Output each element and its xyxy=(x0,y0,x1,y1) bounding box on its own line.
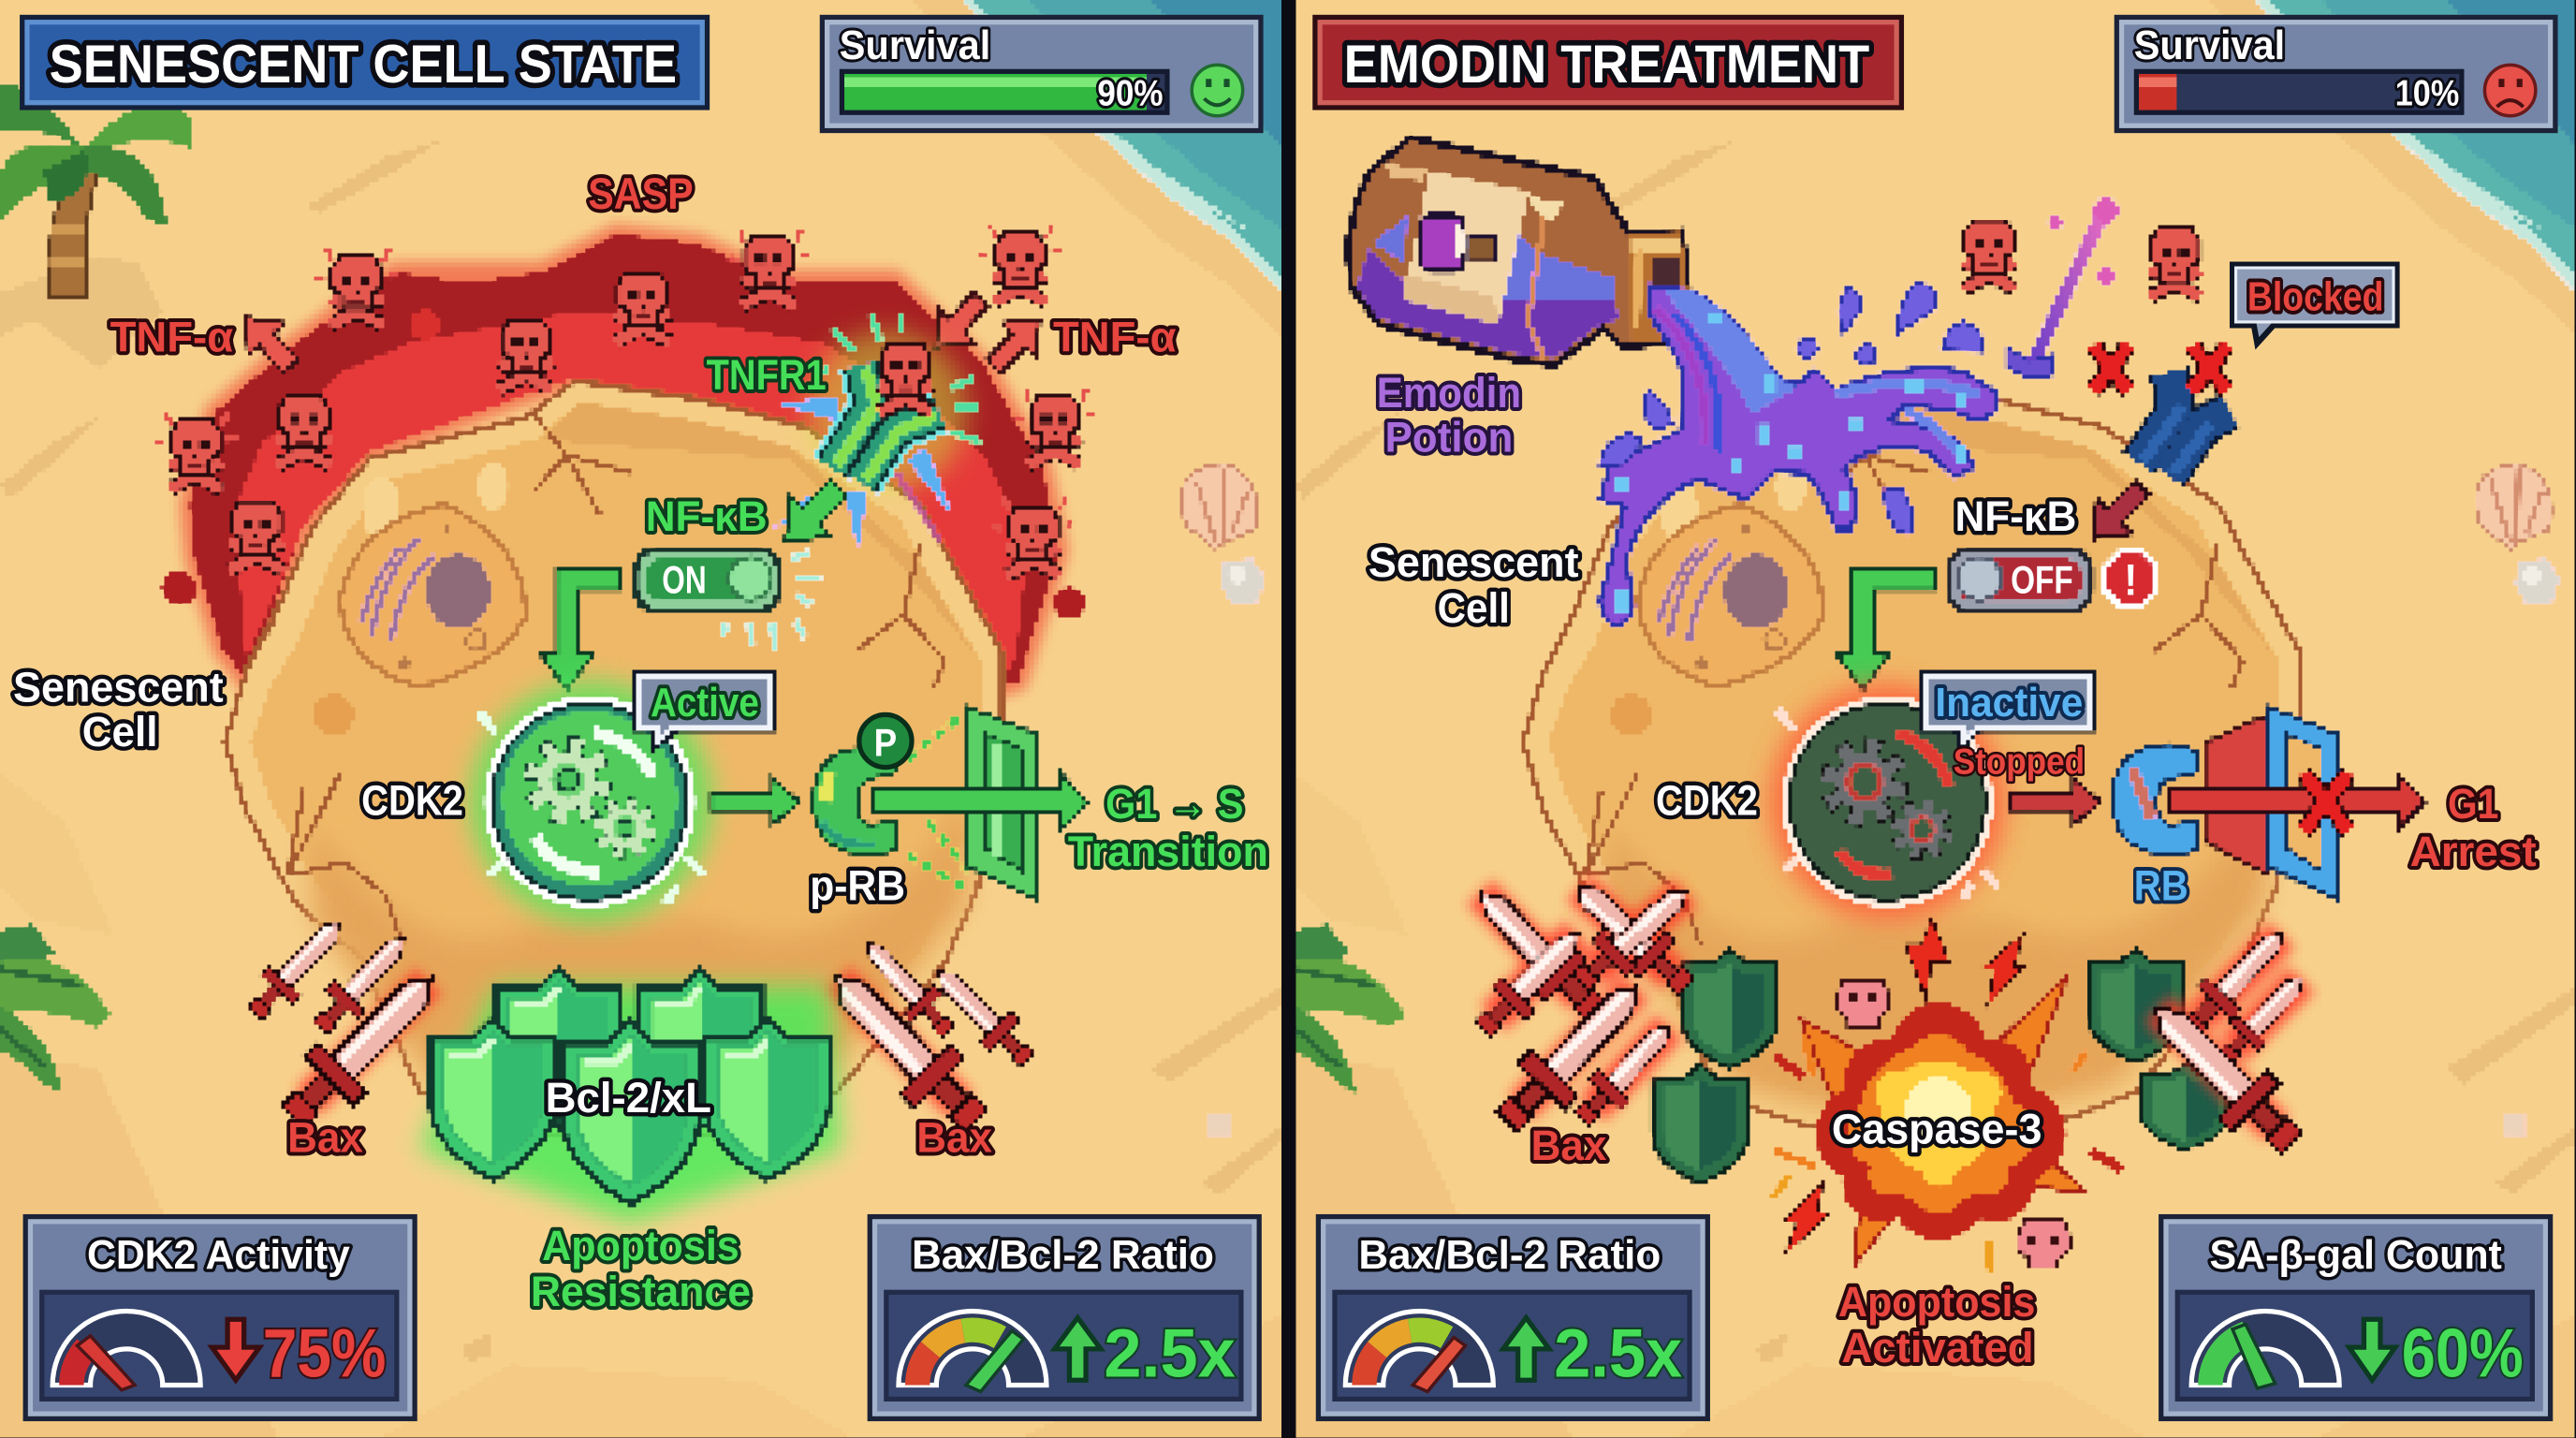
SASP skulls remaining xyxy=(1963,220,2202,298)
label: ON: ON xyxy=(662,558,707,602)
label: G1: G1 xyxy=(2448,780,2498,828)
label: activated: Activated xyxy=(1841,1324,2034,1372)
text labels: emodin panel xyxy=(1368,265,2537,1372)
label: apoptosis: Apoptosis xyxy=(542,1222,739,1269)
metric card: CDK2 activity: CDK2 Activity xyxy=(87,1232,350,1278)
label: NF-kB: NF-κB xyxy=(1954,492,2076,540)
arrow: TNFR1 to NF-kB xyxy=(766,469,858,562)
arrow: up xyxy=(1503,1318,1549,1380)
icon: Bax swords right xyxy=(812,929,1044,1145)
icon: caspase-3 explosion xyxy=(1771,917,2122,1273)
metric card: Bax/Bcl-2 ratio right xyxy=(1316,1214,1710,1421)
bubble: active xyxy=(636,672,774,749)
label: senescent cell: Senescent xyxy=(13,663,224,711)
arrow: G1 to S xyxy=(874,772,1088,831)
icon: Bax swords left xyxy=(1460,867,1703,1144)
icon: Bax swords left xyxy=(238,907,456,1141)
SASP droplets xyxy=(161,570,1086,620)
survival meter: 10 percent: 10% xyxy=(2395,73,2459,113)
survival meter: 90 percent: 90% xyxy=(1097,73,1164,113)
label: Bax: Bax xyxy=(1531,1122,1607,1169)
icon: open gate xyxy=(907,707,1038,901)
label: resistance: Resistance xyxy=(531,1268,751,1315)
title banner: senescent cell state xyxy=(20,15,710,110)
label: caspase-3: Caspase-3 xyxy=(1832,1105,2042,1152)
survival meter: 10 percent: Survival xyxy=(2134,22,2285,68)
arrow: down xyxy=(212,1319,259,1380)
label: inactive: Inactive xyxy=(1935,680,2083,726)
metric card: Bax/Bcl-2 ratio left xyxy=(868,1214,1262,1421)
icon: happy face xyxy=(1192,65,1243,116)
label: Bax right: Bax xyxy=(916,1113,993,1161)
icon: dark shields xyxy=(1653,949,2228,1183)
label: OFF: OFF xyxy=(2011,558,2073,602)
gauge: low activity xyxy=(52,1311,200,1390)
arrow: NF-kB to CDK2 xyxy=(1837,570,1937,690)
label: apoptosis: Apoptosis xyxy=(1838,1278,2035,1326)
metric card: SA-beta-gal count: 60% xyxy=(2402,1314,2524,1392)
title banner: emodin treatment: EMODIN TREATMENT xyxy=(1344,35,1869,95)
icon: sad face xyxy=(2484,65,2536,116)
icon: palm tree xyxy=(0,84,194,370)
label: G1 to S: G1 → S xyxy=(1105,780,1244,828)
metric card: SA-beta-gal count xyxy=(2159,1214,2553,1421)
SASP skulls xyxy=(154,225,1096,575)
beach background with ocean xyxy=(0,0,1281,1438)
arrow: TNF-alpha right xyxy=(976,302,1057,384)
beach background with ocean xyxy=(1295,0,2576,1438)
bubble: inactive xyxy=(1924,672,2095,749)
label: blocked bubble xyxy=(2232,265,2397,344)
icon: phosphorylated RB xyxy=(813,748,895,855)
metric card: Bax/Bcl-2 ratio left: Bax/Bcl-2 Ratio xyxy=(912,1232,1214,1278)
gauge: rising ratio xyxy=(899,1311,1046,1391)
senescent cell body with nucleus xyxy=(225,381,1003,1141)
title banner: senescent cell state: SENESCENT CELL STATE xyxy=(50,35,677,95)
label: CDK2: CDK2 xyxy=(361,776,463,824)
arrow: CDK2 to p-RB xyxy=(711,779,800,825)
P badge: P xyxy=(874,720,897,764)
senescent cell body with nucleus xyxy=(1523,381,2300,1141)
label: SASP: SASP xyxy=(588,169,694,219)
icon: unphosphorylated RB xyxy=(2113,744,2196,855)
arrow: inactive signal xyxy=(2075,471,2159,556)
metric card: Bax/Bcl-2 ratio right: 2.5x xyxy=(1554,1314,1682,1392)
arrow: TNF-alpha left xyxy=(228,301,309,383)
label: stopped: Stopped xyxy=(1954,742,2085,783)
label: blocked bubble: Blocked xyxy=(2247,274,2384,320)
icon: potion splash xyxy=(1600,283,1998,624)
metric card: Bax/Bcl-2 ratio right: Bax/Bcl-2 Ratio xyxy=(1358,1232,1661,1278)
label: emodin: Emodin xyxy=(1377,369,1521,417)
arrow: NF-kB to CDK2 xyxy=(540,570,621,690)
label: CDK2: CDK2 xyxy=(1656,776,1758,824)
arrow: CDK2 to RB blocked xyxy=(2011,779,2101,825)
survival meter: 10 percent xyxy=(2115,15,2558,133)
arrow: blocked G1 transition xyxy=(2170,772,2424,831)
toggle: NF-kB off xyxy=(1945,546,2095,614)
label: Bax left: Bax xyxy=(287,1113,363,1161)
label: TNFR1: TNFR1 xyxy=(707,351,827,399)
icon: arrest cross xyxy=(2304,772,2349,831)
panel: emodin treatment xyxy=(1295,0,2576,1438)
label: potion: Potion xyxy=(1384,414,1513,462)
metric card: Bax/Bcl-2 ratio left: 2.5x xyxy=(1104,1314,1236,1392)
SASP red toxic cloud xyxy=(189,233,1060,690)
arrow: TNF-alpha into receptor xyxy=(918,282,999,364)
survival meter: 90 percent xyxy=(820,15,1264,133)
panel divider xyxy=(1281,0,1295,1438)
label: RB: RB xyxy=(2134,862,2188,910)
label: p-RB: p-RB xyxy=(810,862,905,910)
label: TNF-alpha left: TNF-α xyxy=(110,314,233,361)
label: Bcl-2/xL: Bcl-2/xL xyxy=(546,1074,711,1122)
icon: Bcl-2/xL shields xyxy=(419,968,842,1224)
label: TNF-alpha right: TNF-α xyxy=(1053,314,1177,361)
label: alert mark: ! xyxy=(2124,555,2137,605)
arrow: down xyxy=(2349,1319,2395,1380)
toggle: NF-kB on xyxy=(633,546,822,651)
icon: CDK2 active ball xyxy=(470,681,713,923)
arrow: up xyxy=(1055,1318,1101,1380)
label: senescent: Senescent xyxy=(1368,538,1579,586)
title banner: emodin treatment xyxy=(1312,15,1904,110)
label: Transition: Transition xyxy=(1068,828,1268,875)
label: cell: Cell xyxy=(1438,584,1510,632)
metric card: CDK2 activity xyxy=(23,1214,417,1421)
metric card: SA-beta-gal count: SA-β-gal Count xyxy=(2209,1232,2502,1278)
gauge: rising ratio xyxy=(1345,1311,1493,1391)
icon: closed gate xyxy=(2204,707,2337,901)
label: cell: Cell xyxy=(82,708,157,756)
text labels: senescent panel xyxy=(13,169,1268,1315)
icon: blocked red crosses xyxy=(2093,345,2228,391)
label: NF-kB: NF-κB xyxy=(646,492,768,540)
P badge xyxy=(859,714,912,768)
icon: TNFR1 receptor with rays xyxy=(772,315,981,552)
label: Active: Active xyxy=(651,680,759,726)
artwork: senescent cell scene xyxy=(0,0,1281,1438)
panel: senescent cell state xyxy=(0,0,1281,1438)
icon: CDK2 inactive ball xyxy=(1769,683,2006,920)
icon: blocked signal needle xyxy=(2008,198,2119,378)
artwork: emodin scene xyxy=(1295,0,2576,1438)
icon: Bax swords right xyxy=(2132,917,2317,1167)
icon: inactive receptor xyxy=(2139,372,2231,477)
metric card: CDK2 activity: 75% xyxy=(263,1314,386,1392)
label: arrest: Arrest xyxy=(2410,828,2537,875)
survival meter: 90 percent: Survival xyxy=(840,22,990,68)
droplets xyxy=(1600,283,1983,534)
icon: emodin potion bottle xyxy=(1348,138,1688,365)
icon: alert octagon xyxy=(2104,552,2157,605)
gauge: falling count xyxy=(2191,1311,2339,1388)
